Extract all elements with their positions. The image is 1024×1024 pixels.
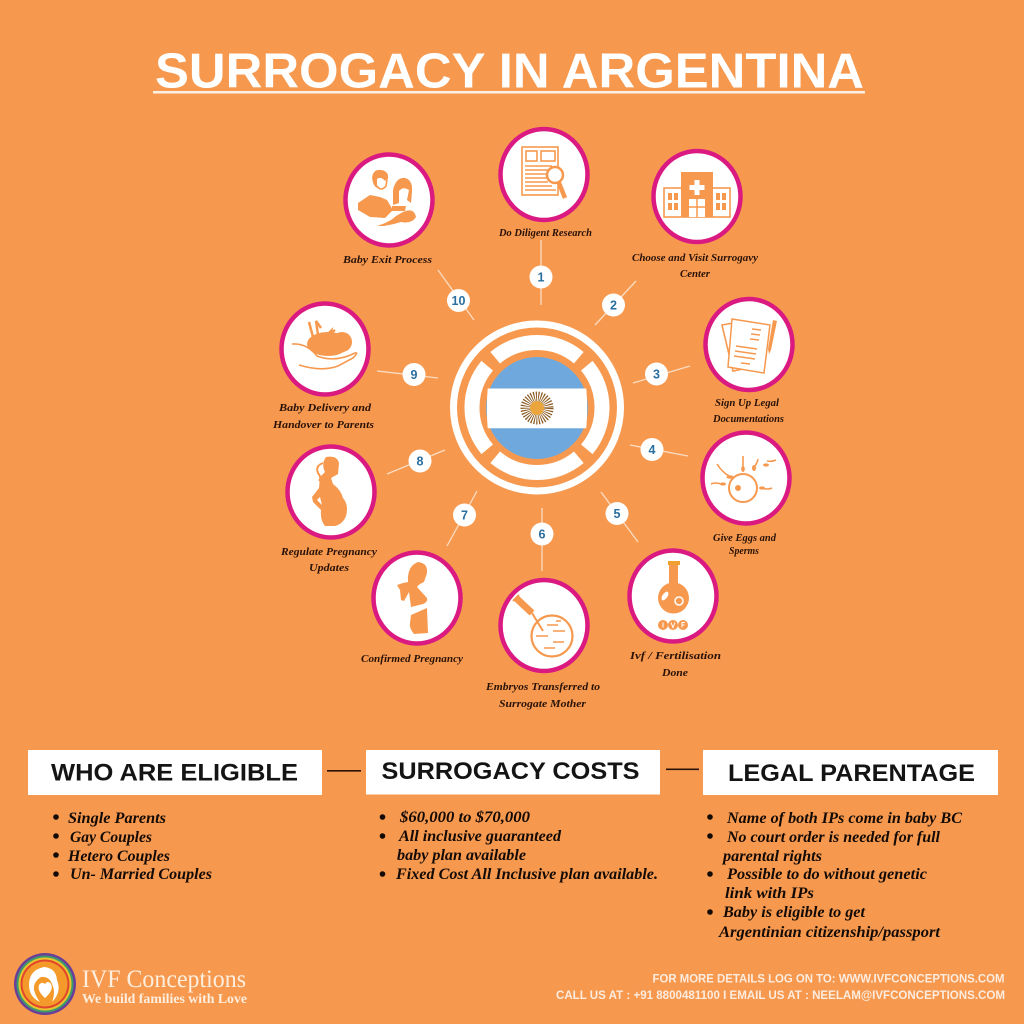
step 6 connector and number: 6 — [539, 528, 546, 542]
step 7 connector and number: 7 — [461, 508, 468, 522]
step: embryos transferred to surrogate mother: Surrogate Mother — [499, 698, 587, 710]
step 1 connector and number: 1 — [538, 270, 545, 284]
step: ivf fertilisation done: Done — [661, 667, 688, 679]
step 2 connector and number — [595, 281, 636, 325]
step 9 connector and number: 9 — [411, 368, 418, 382]
logo: ivf conceptions: IVF Conceptions — [82, 966, 246, 993]
connector line between panels — [666, 768, 699, 770]
contact details: FOR MORE DETAILS LOG ON TO: WWW.IVFCONCEPTIONS.COM — [652, 974, 1004, 986]
step: baby exit process: Baby Exit Process — [342, 254, 432, 266]
panel: who are eligible: Hetero Couples — [67, 848, 170, 865]
step: choose and visit surrogacy center: Choose and Visit Surrogavy — [632, 252, 758, 264]
icon: woman silhouette with test — [397, 562, 428, 634]
step: do diligent research — [498, 129, 592, 239]
step: sign up legal documentations: Documentations — [712, 413, 784, 425]
contact details — [556, 974, 1005, 1002]
step: baby exit process — [342, 154, 432, 266]
panel: surrogacy costs: Fixed Cost All Inclusive plan available. — [395, 866, 658, 883]
panel: surrogacy costs: SURROGACY COSTS — [382, 758, 640, 785]
panel: legal parentage: No court order is needed for full — [726, 829, 941, 846]
step: ivf fertilisation done — [629, 550, 721, 679]
icon: document and magnifier — [522, 147, 565, 198]
step: sign up legal documentations — [706, 299, 792, 425]
icon: hospital — [664, 172, 730, 217]
step: baby delivery and handover to parents: Baby Delivery and — [278, 402, 372, 414]
icon: baby in hand — [292, 321, 357, 369]
step: confirmed pregnancy: Confirmed Pregnancy — [361, 653, 463, 665]
panel: who are eligible: Single Parents — [68, 810, 166, 827]
step: choose and visit surrogacy center: Center — [680, 268, 711, 280]
panel: legal parentage: Name of both IPs come in baby BC — [726, 810, 963, 827]
step: baby delivery and handover to parents: Handover to Parents — [272, 419, 374, 431]
step 5 connector and number: 5 — [614, 507, 621, 521]
icon: syringe and embryo dish — [513, 595, 572, 656]
step 1 connector and number — [530, 240, 552, 305]
logo: ivf conceptions: We build families with Love — [82, 991, 247, 1006]
step: embryos transferred to surrogate mother: Embryos Transferred to — [485, 681, 601, 693]
panel: who are eligible: Gay Couples — [70, 829, 152, 846]
panel: legal parentage: Baby is eligible to get — [722, 904, 866, 921]
step: do diligent research: Do Diligent Research — [498, 227, 592, 239]
connector line between panels — [327, 770, 361, 772]
step 9 connector and number — [377, 363, 438, 386]
panel: legal parentage: Argentinian citizenship/passport — [718, 924, 941, 941]
step 3 connector and number — [633, 362, 690, 386]
step 8 connector and number: 8 — [417, 454, 424, 468]
step 3 connector and number: 3 — [653, 368, 660, 382]
step: sign up legal documentations: Sign Up Legal — [715, 397, 780, 409]
panel: who are eligible: Un- Married Couples — [70, 866, 212, 883]
step: embryos transferred to surrogate mother — [485, 580, 601, 710]
panel: surrogacy costs: All inclusive guaranteed — [398, 828, 561, 845]
step: confirmed pregnancy — [361, 552, 463, 665]
logo: ivf conceptions — [14, 953, 247, 1015]
step: regulate pregnancy updates: Regulate Pregnancy — [280, 546, 377, 558]
step: give eggs and sperms: Sperms — [729, 545, 759, 557]
panel: surrogacy costs — [366, 750, 660, 883]
panel: legal parentage — [703, 750, 998, 941]
panel: who are eligible — [28, 750, 322, 883]
panel: legal parentage: link with IPs — [725, 885, 814, 902]
central flag emblem — [454, 324, 620, 491]
panel: legal parentage: Possible to do without genetic — [727, 866, 927, 883]
icon: egg and sperm cells — [711, 456, 776, 502]
panel: legal parentage: parental rights — [721, 848, 822, 865]
step 7 connector and number — [447, 491, 477, 546]
step 8 connector and number — [387, 450, 445, 474]
step: choose and visit surrogacy center — [632, 151, 758, 280]
icon: parents with baby — [358, 170, 416, 226]
step: regulate pregnancy updates — [280, 446, 377, 574]
panel: who are eligible: WHO ARE ELIGIBLE — [51, 760, 298, 786]
panel: legal parentage: LEGAL PARENTAGE — [728, 760, 975, 787]
step: ivf fertilisation done: Ivf / Fertilisation — [629, 650, 721, 662]
icon: ponytail — [317, 463, 323, 481]
step: regulate pregnancy updates: Updates — [309, 562, 349, 574]
title: SURROGACY IN ARGENTINA — [155, 44, 864, 98]
step 4 connector and number: 4 — [649, 443, 656, 457]
step: give eggs and sperms — [702, 432, 790, 557]
step 10 connector and number: 10 — [452, 294, 465, 308]
step 5 connector and number — [601, 492, 638, 542]
step 10 connector and number — [438, 270, 474, 320]
step 2 connector and number: 2 — [610, 298, 617, 312]
step: give eggs and sperms: Give Eggs and — [713, 532, 776, 544]
step: baby delivery and handover to parents — [272, 304, 374, 431]
step 6 connector and number — [530, 508, 554, 571]
panel: surrogacy costs: baby plan available — [397, 847, 526, 864]
icon: legal papers and pen — [722, 319, 777, 373]
icon: flask — [658, 561, 689, 630]
icon: pregnant woman silhouette — [312, 457, 347, 526]
step 4 connector and number — [630, 438, 688, 461]
contact details: CALL US AT : +91 8800481100 I EMAIL US AT : NEELAM@IVFCONCEPTIONS.COM — [556, 990, 1005, 1002]
panel: surrogacy costs: $60,000 to $70,000 — [399, 809, 530, 826]
